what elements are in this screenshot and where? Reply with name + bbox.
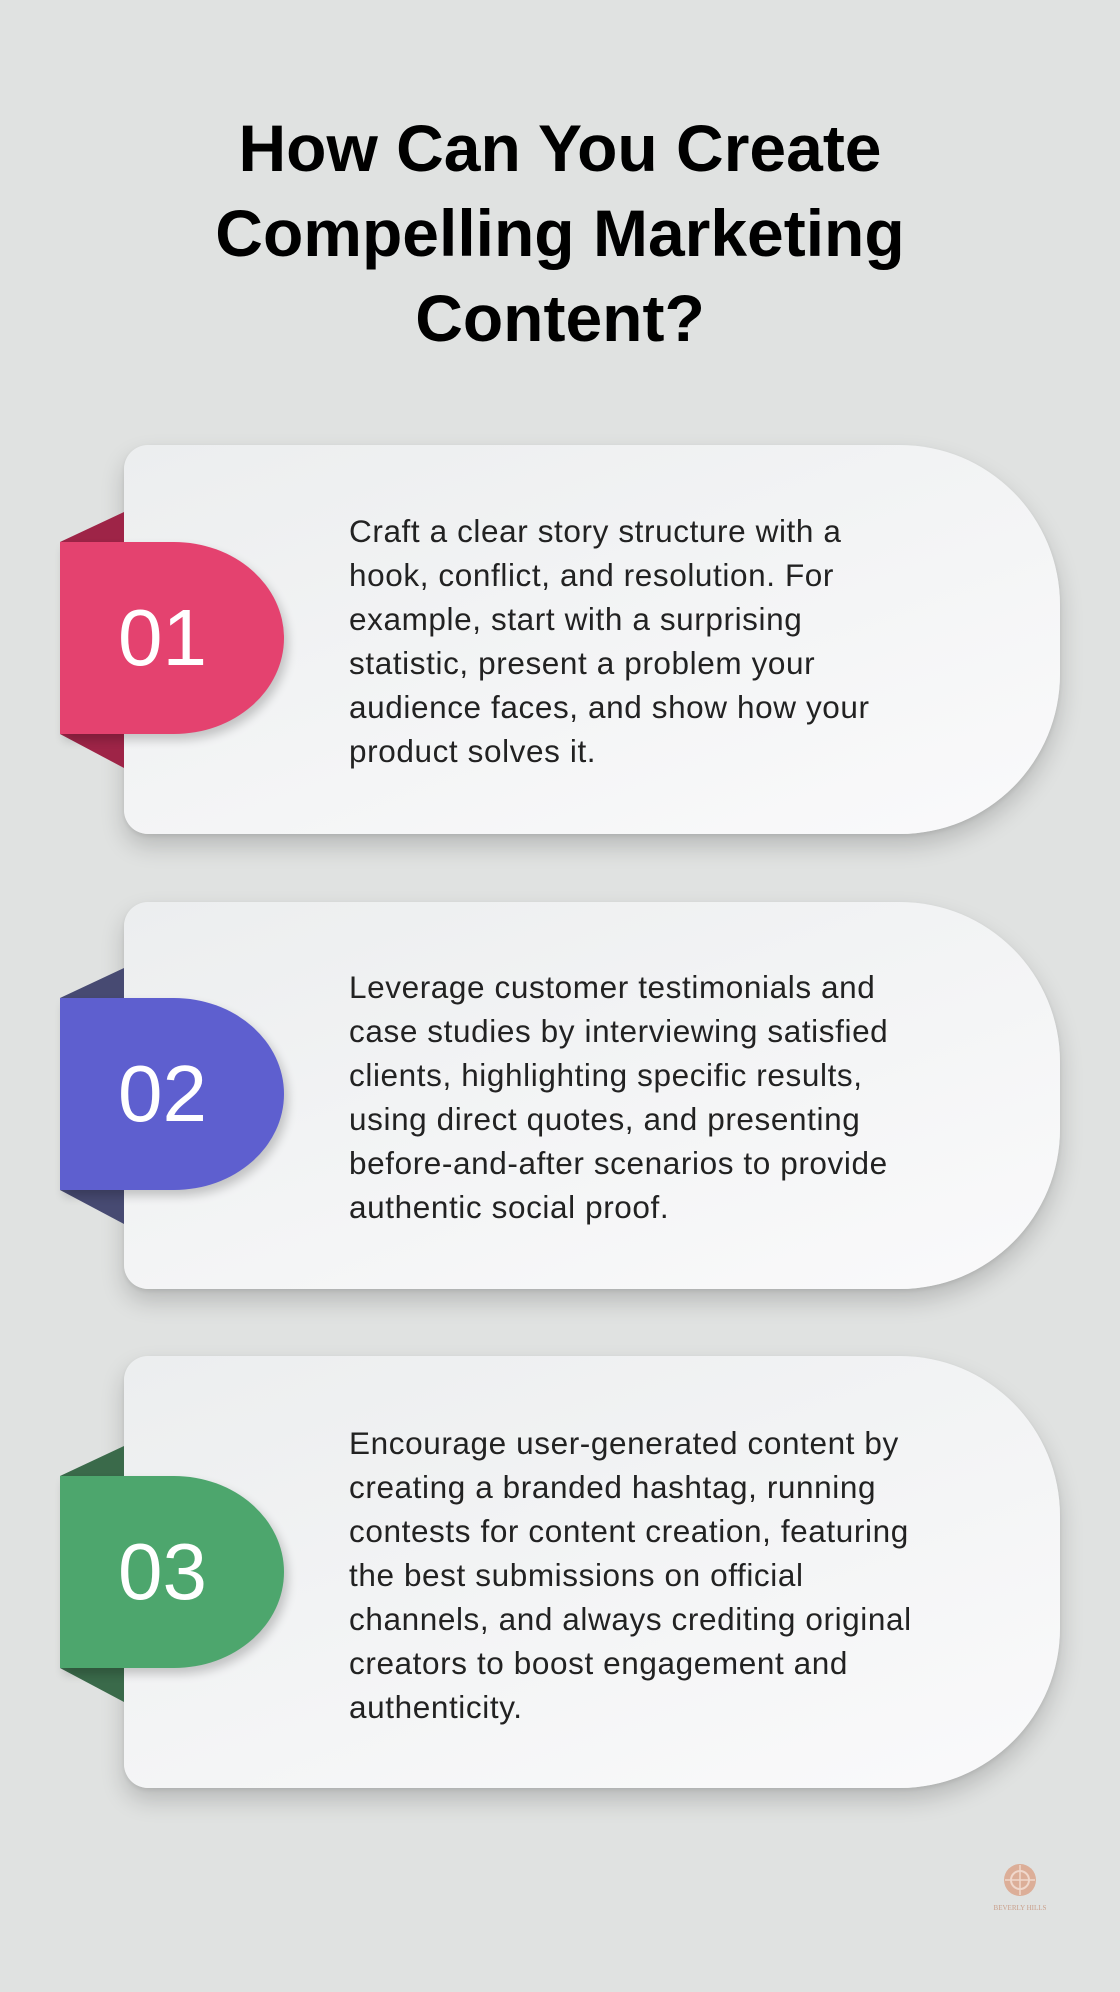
- text 1: example, start with a surprising: [349, 601, 802, 637]
- number tab 03: [60, 1476, 284, 1668]
- text 2: using direct quotes, and presenting: [349, 1101, 860, 1137]
- text 3: creating a branded hashtag, running: [349, 1469, 876, 1505]
- text 2: case studies by interviewing satisfied: [349, 1013, 888, 1049]
- text 2: clients, highlighting specific results,: [349, 1057, 863, 1093]
- text 3: Encourage user-generated content by: [349, 1425, 899, 1461]
- text 3: [349, 1425, 912, 1725]
- card 3: [124, 1356, 1060, 1788]
- text 3: authenticity.: [349, 1689, 523, 1725]
- text 2: [349, 969, 888, 1225]
- title: Compelling Marketing: [215, 196, 905, 270]
- text 1: [349, 513, 870, 769]
- title: Content?: [415, 281, 705, 355]
- text 2: before-and-after scenarios to provide: [349, 1145, 888, 1181]
- number tab 02: 02: [118, 1049, 207, 1138]
- text 3: channels, and always crediting original: [349, 1601, 912, 1637]
- text 2: authentic social proof.: [349, 1189, 669, 1225]
- text 3: creators to boost engagement and: [349, 1645, 848, 1681]
- fold top 1: [60, 512, 124, 542]
- number tab 03: 03: [118, 1527, 207, 1616]
- text 1: statistic, present a problem your: [349, 645, 815, 681]
- fold top 2: [60, 968, 124, 998]
- fold bottom 2: [60, 1190, 124, 1224]
- text 3: contests for content creation, featuring: [349, 1513, 909, 1549]
- fold bottom 1: [60, 734, 124, 768]
- text 1: audience faces, and show how your: [349, 689, 870, 725]
- text 3: the best submissions on official: [349, 1557, 804, 1593]
- card 1: [124, 445, 1060, 834]
- text 1: Craft a clear story structure with a: [349, 513, 842, 549]
- title: How Can You Create: [238, 111, 882, 185]
- logo: [994, 1864, 1046, 1912]
- number tab 01: [60, 542, 284, 734]
- logo: BEVERLY HILLS: [994, 1904, 1046, 1912]
- number tab 01: 01: [118, 593, 207, 682]
- fold top 3: [60, 1446, 124, 1476]
- text 1: hook, conflict, and resolution. For: [349, 557, 834, 593]
- title: [215, 111, 905, 355]
- number tab 02: [60, 998, 284, 1190]
- fold bottom 3: [60, 1668, 124, 1702]
- card 2: [124, 902, 1060, 1289]
- text 1: product solves it.: [349, 733, 596, 769]
- text 2: Leverage customer testimonials and: [349, 969, 875, 1005]
